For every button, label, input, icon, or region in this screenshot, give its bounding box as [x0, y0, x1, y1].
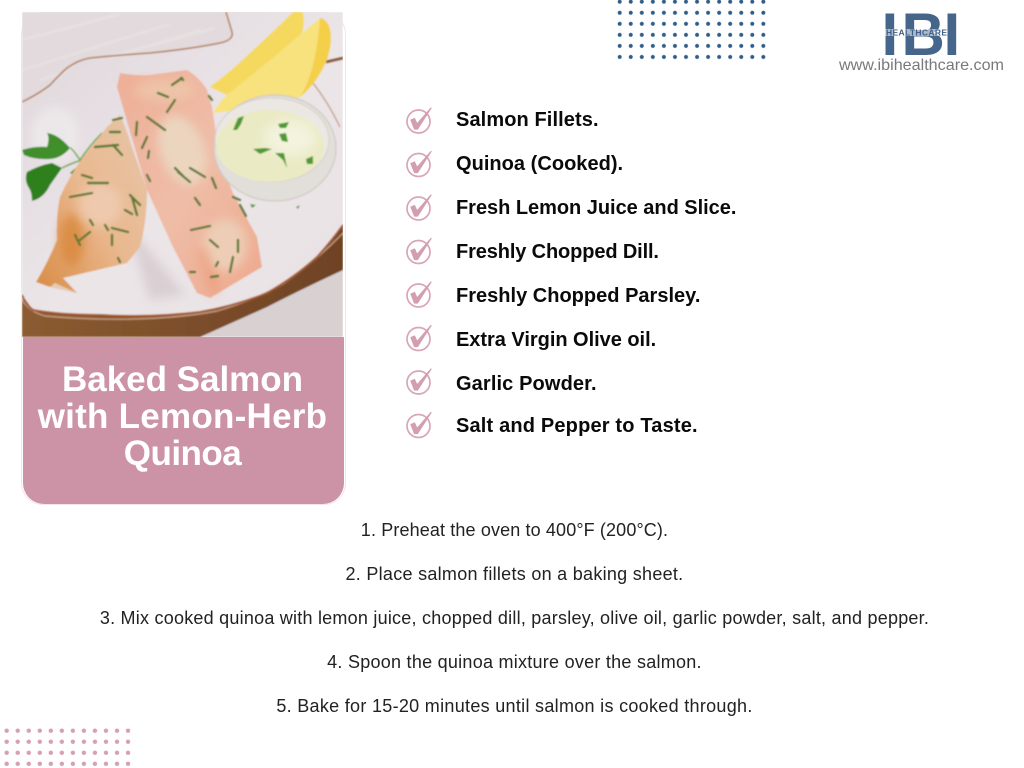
- preparation steps: 5. Bake for 15-20 minutes until salmon is cooked through.: [276, 696, 753, 716]
- ingredients list: Freshly Chopped Parsley.: [456, 285, 700, 307]
- preparation steps: [100, 520, 929, 716]
- ingredients list: Extra Virgin Olive oil.: [456, 329, 656, 351]
- wood board: [22, 225, 343, 337]
- title: [38, 360, 327, 473]
- logo: IBI Healthcare: HEALTHCARE: [886, 28, 947, 38]
- ingredients list: Freshly Chopped Dill.: [456, 241, 659, 263]
- dot pattern: top navy: [618, 0, 766, 60]
- logo: IBI Healthcare: [838, 5, 1004, 74]
- dot pattern: bottom pink: [4, 728, 130, 766]
- ingredients list: Salt and Pepper to Taste.: [456, 415, 698, 437]
- salmon fillet left: [36, 115, 147, 293]
- plate: [22, 12, 343, 316]
- preparation steps: 1. Preheat the oven to 400°F (200°C).: [361, 520, 668, 540]
- preparation steps: 4. Spoon the quinoa mixture over the salmon.: [327, 652, 702, 672]
- sauce bowl: [214, 95, 336, 201]
- checklist icons: [406, 108, 432, 438]
- ingredients list: Garlic Powder.: [456, 373, 597, 395]
- preparation steps: 3. Mix cooked quinoa with lemon juice, chopped dill, parsley, olive oil, garlic powder, salt, and pepper.: [100, 608, 929, 628]
- herb flecks on salmon: [70, 78, 246, 277]
- salmon fillet right: [117, 70, 262, 298]
- ingredients list: Salmon Fillets.: [456, 109, 599, 131]
- card outline: [21, 12, 346, 505]
- photo: baked salmon plate: [22, 12, 343, 337]
- parsley garnish: [22, 133, 102, 201]
- ingredients list: Quinoa (Cooked).: [456, 153, 623, 175]
- title: Quinoa: [124, 434, 241, 473]
- title: Baked Salmon: [62, 360, 303, 399]
- lemon wedges: [210, 12, 304, 95]
- title band: [23, 337, 344, 504]
- title: with Lemon-Herb: [38, 397, 327, 436]
- ingredients list: Fresh Lemon Juice and Slice.: [456, 197, 736, 219]
- logo: IBI Healthcare: www.ibihealthcare.com: [838, 57, 1004, 74]
- panel: recipe title card with photo: [21, 12, 346, 505]
- ingredients list: [456, 109, 736, 437]
- preparation steps: 2. Place salmon fillets on a baking sheet.: [346, 564, 683, 584]
